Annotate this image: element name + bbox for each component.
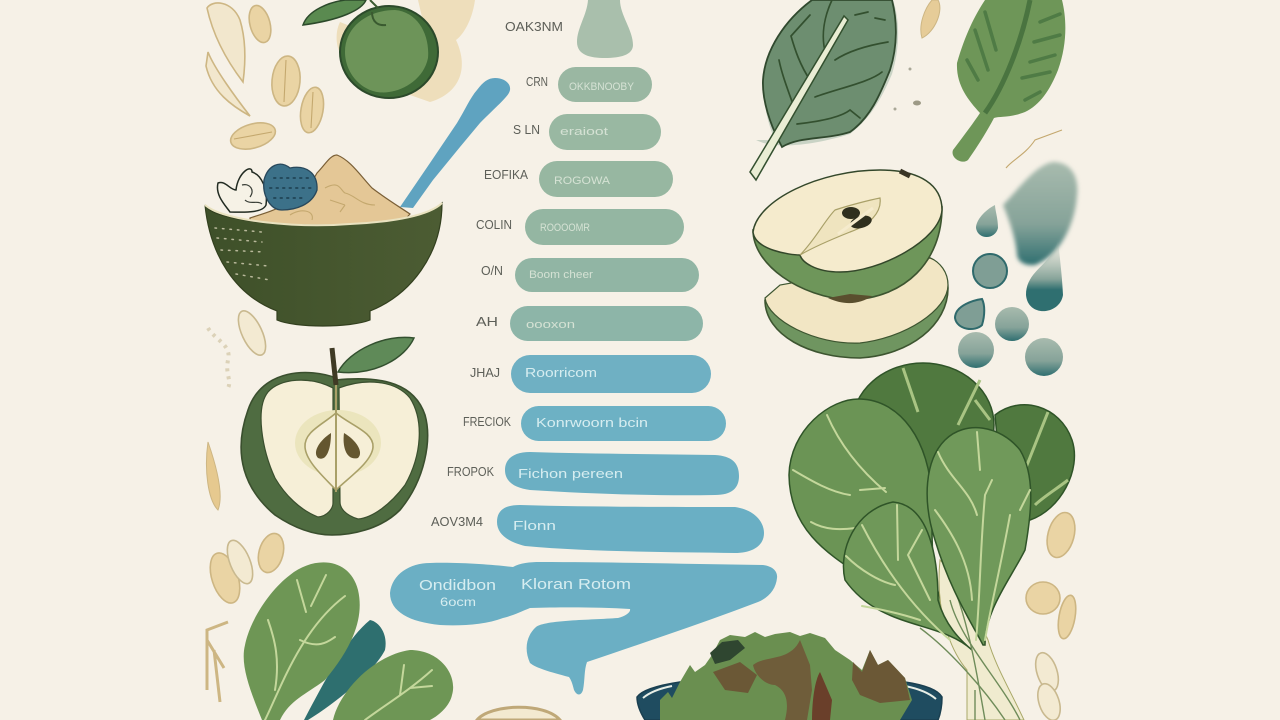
tier 7: AH <box>476 315 498 329</box>
oat mound <box>250 155 410 225</box>
tier 5: COLIN <box>476 218 512 232</box>
sliced apple <box>753 170 948 358</box>
tier 1 drop <box>505 0 633 58</box>
tier 12 base speech-shaped block <box>390 562 777 694</box>
lower left leaf <box>843 502 972 650</box>
halved apple <box>241 337 428 535</box>
tier 7 <box>476 306 703 341</box>
upper slice rind <box>753 207 942 300</box>
main left leaf <box>789 399 950 620</box>
spoon <box>400 78 510 208</box>
seeds <box>316 433 331 459</box>
top-left oats and wheat <box>206 3 327 154</box>
lower slice <box>765 258 948 358</box>
partial pale dish at bottom <box>477 707 560 720</box>
green apple <box>303 0 475 102</box>
flesh left <box>261 380 333 517</box>
tier 3 <box>513 114 661 150</box>
tier 1 drop: OAK3NM <box>505 20 563 34</box>
tier 12 base speech-shaped block: Kloran Rotom <box>521 576 631 593</box>
tier 2: OKKBNOOBY <box>569 81 635 93</box>
tier 6 <box>481 258 699 292</box>
tier 10 <box>447 452 739 495</box>
tier 12 base speech-shaped block: Ondidbon <box>419 577 496 594</box>
back leaf <box>852 363 994 487</box>
tier 5 <box>476 209 684 245</box>
tier 4 <box>484 161 673 197</box>
plain green leaf <box>953 0 1065 162</box>
tier 3: eraioot <box>560 126 608 138</box>
tier 11: AOV3M4 <box>431 515 483 529</box>
left side oats and sprigs <box>205 307 288 702</box>
tier 9: FRECIOK <box>463 415 512 429</box>
tier 10: Fichon pereen <box>518 466 623 481</box>
large leafy greens <box>789 363 1074 720</box>
tier 8: JHAJ <box>470 366 500 380</box>
tier 4: ROGOWA <box>554 175 611 187</box>
tier 7: oooxon <box>526 319 575 331</box>
stems <box>939 560 1024 720</box>
stem strands <box>920 590 1020 720</box>
flesh right <box>339 382 419 519</box>
tier 3: S LN <box>513 123 540 137</box>
tier 2: CRN <box>526 75 548 89</box>
tier 2 <box>526 67 652 102</box>
cauliflower <box>217 169 266 212</box>
right side oats <box>1026 509 1080 720</box>
tier 8: Roorricom <box>525 365 597 380</box>
upper slice flesh <box>753 170 942 272</box>
tier 9 <box>463 406 726 441</box>
bowl body <box>205 203 442 326</box>
leaf <box>338 337 414 373</box>
green droplets <box>955 130 1077 376</box>
right leaf <box>333 650 453 720</box>
bottom-left spinach <box>244 562 453 720</box>
tier 10: FROPOK <box>447 465 495 479</box>
right front leaf <box>927 428 1031 645</box>
bowl dots <box>215 228 270 280</box>
tier 6: O/N <box>481 264 503 278</box>
stem <box>332 348 336 385</box>
tier 11 <box>431 505 764 553</box>
tier 11: Flonn <box>513 518 556 533</box>
right back leaf <box>995 405 1074 520</box>
tier 9: Konrwoorn bcin <box>536 415 648 430</box>
bowl of greens <box>637 632 942 720</box>
blueberry <box>264 164 317 210</box>
pyramid chart <box>390 0 777 694</box>
teal leaf <box>304 620 386 720</box>
tier 8 <box>470 355 711 393</box>
oatmeal bowl with spoon <box>205 78 510 326</box>
tier 12 base speech-shaped block: 6ocm <box>440 595 476 609</box>
veined spinach leaf <box>750 0 898 180</box>
front leaf <box>244 562 360 720</box>
core <box>295 410 381 476</box>
tier 5: ROOOOMR <box>540 222 590 234</box>
tier 4: EOFIKA <box>484 168 529 182</box>
tier 6: Boom cheer <box>529 269 593 281</box>
top right oat and specks <box>894 0 940 110</box>
